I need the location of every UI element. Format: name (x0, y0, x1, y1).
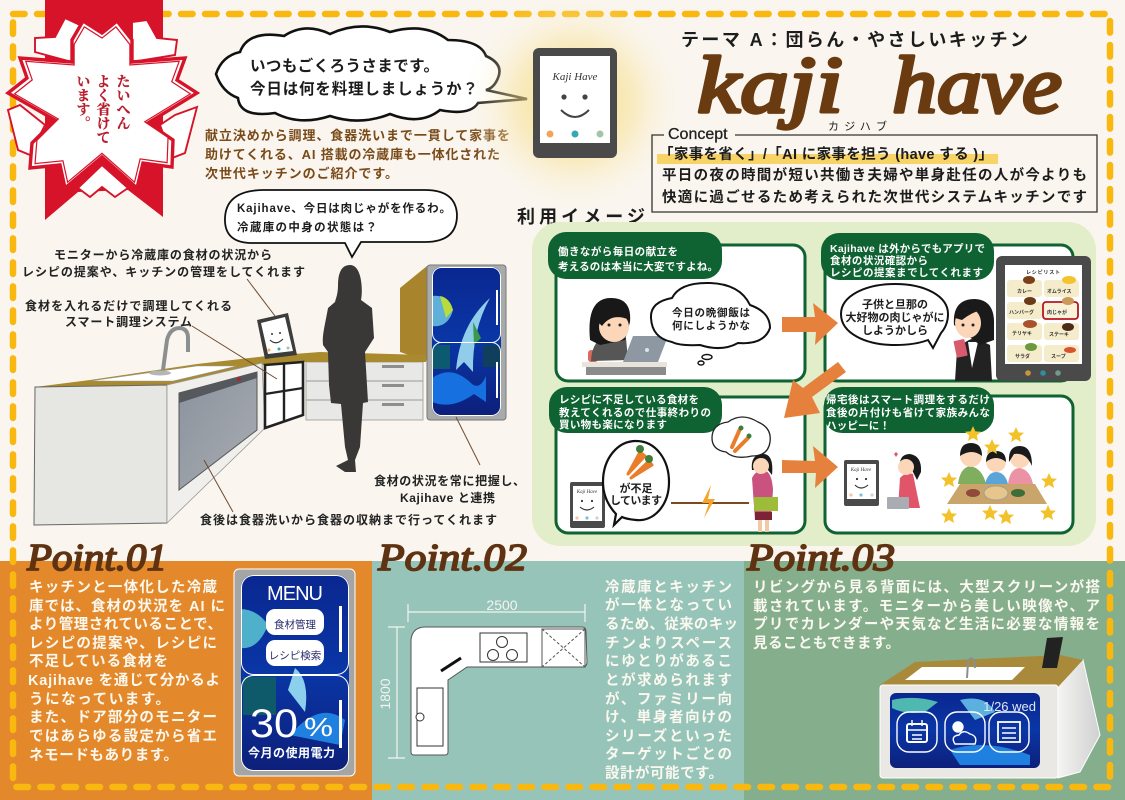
speech cloud: greeting: 今日は何を料理しましょうか？ (250, 79, 478, 98)
card 2: app (821, 233, 1091, 381)
island front (34, 385, 167, 525)
logo kaji have: have (892, 42, 1062, 130)
counter top (35, 352, 426, 387)
recipe tablet: 肉じゃが (1047, 309, 1067, 316)
card 1: thinking about menu: 働きながら毎日の献立を (558, 245, 678, 258)
speech oval: 子供と旦那の (862, 297, 928, 311)
annotations with leader lines: モニターから冷蔵庫の食材の状況から (54, 247, 272, 262)
woman silhouette (323, 265, 374, 472)
glowing tablet: Kaji Have (552, 71, 598, 83)
point 02 text: にゆとりがあるこ (605, 652, 732, 670)
badge text (74, 74, 130, 144)
fridge menu screen: 今月の使用電力 (248, 745, 335, 760)
point 01 text: キッチンと一体化した冷蔵 (29, 579, 218, 596)
fridge menu screen: 食材管理 (274, 618, 316, 631)
speech oval with carrots: が不足 (620, 481, 652, 495)
arrow: card 2 to card 3 (784, 362, 846, 418)
woman with phone (953, 299, 994, 381)
fridge menu screen: レシピ検索 (269, 649, 321, 662)
concept box: 快適に過ごせるため考えられた次世代システムキッチンです (662, 188, 1087, 206)
point 01 text: うになっています。 (29, 691, 170, 708)
badge text: たいへん (114, 74, 130, 130)
woman at laptop (582, 298, 668, 375)
intro text: 助けてくれる、AI 搭載の冷蔵庫も一体化された (205, 147, 500, 162)
concept box: 「家事を省く」/「AI に家事を担う (have する )」 (659, 145, 993, 163)
arrow: card 3 to card 4 (782, 446, 838, 488)
annotations with leader lines: 食材を入れるだけで調理してくれる (25, 298, 232, 313)
point 03 heading: Point.03 (746, 537, 895, 579)
annotations with leader lines: Kajihave と連携 (400, 490, 495, 505)
speech bubble: woman asks kajihave (225, 190, 457, 257)
point 01 heading: Point.01 (26, 537, 167, 579)
usage image heading: 利用イメージ (517, 207, 645, 227)
fridge menu screen: 30 (250, 702, 298, 746)
card 2: app: レシピの提案までしてくれます (830, 266, 983, 279)
red ribbon badge (8, 0, 197, 220)
card 3: shopping: 買い物も楽になります (559, 418, 667, 431)
speech cloud: greeting: いつもごくろうさまです。 (250, 56, 439, 75)
panel: point 03 (746, 537, 1100, 778)
recipe tablet: カレー (1017, 288, 1032, 295)
tablet: Kaji Have (850, 468, 872, 473)
point 02 text: が、ファミリー向 (605, 690, 732, 708)
thought cloud with carrots (712, 417, 770, 457)
annotations with leader lines: 食後は食器洗いから食器の収納まで行ってくれます (200, 512, 497, 527)
point 02 text: るため、従来のキッ (605, 616, 738, 633)
recipe tablet: スープ (1051, 353, 1066, 360)
point 02 text: 設計が可能です。 (605, 764, 723, 782)
intro text: 献立決めから調理、食器洗いまで一貫して家事を (205, 128, 510, 143)
point 03 text (753, 578, 1100, 652)
card 3: shopping: レシピに不足している食材を (559, 393, 699, 406)
card 4: happy family: ハッピーに！ (826, 420, 890, 432)
badge text: います。 (74, 74, 90, 130)
recipe tablet: ハンバーグ (1009, 309, 1034, 316)
speech oval with carrots (603, 441, 669, 525)
concept box: 平日の夜の時間が短い共働き夫婦や単身赴任の人が今よりも (662, 166, 1087, 184)
thought bubble: 何にしようかな (672, 319, 750, 332)
connection line with lightning (671, 485, 749, 518)
stars (941, 426, 1057, 524)
point 01 text: ではあらゆる設定から省エ (29, 727, 217, 745)
fridge menu screen (234, 569, 355, 776)
point 03 text: リビングから見る背面には、大型スクリーンが搭 (753, 578, 1100, 596)
glowing tablet (463, 0, 687, 214)
recipe tablet: サラダ (1015, 353, 1030, 360)
point 02 text: チンよりスペース (605, 635, 732, 652)
woman cooking (887, 452, 921, 509)
point 03 text: 見ることもできます。 (753, 635, 900, 652)
floor plan: 1800 (377, 678, 393, 710)
card 4: happy family (824, 387, 1073, 533)
counter tablet (257, 313, 297, 359)
fridge menu screen: MENU (267, 583, 323, 605)
card 4: happy family: 帰宅後はスマート調理をするだけ (826, 393, 990, 406)
island with back screen (880, 637, 1100, 778)
panel: point 02 (377, 537, 738, 782)
card 2: app: 食材の状況確認から (830, 254, 928, 267)
small tablet: Kaji Have (576, 490, 598, 495)
logo kaji have (697, 42, 1062, 133)
panel: point 01 (26, 537, 355, 776)
speech bubble: woman asks kajihave: Kajihave、今日は肉じゃがを作るわ。 (237, 201, 451, 215)
tablet (844, 460, 879, 506)
speech oval with carrots: しています (610, 494, 662, 507)
annotations with leader lines: スマート調理システム (65, 315, 192, 329)
thought bubble (651, 283, 770, 365)
point 02 text (605, 579, 738, 782)
arrow: card 1 to card 2 (782, 303, 838, 345)
family eating (947, 443, 1047, 504)
bottom colour bands (0, 561, 1125, 800)
speech oval: しようかしら (862, 324, 928, 337)
point 02 text: け、単身者向けの (605, 708, 732, 726)
point 02 text: 冷蔵庫とキッチン (605, 579, 732, 596)
point 01 text (28, 579, 225, 764)
sink (90, 366, 237, 381)
thought bubble: 今日の晩御飯は (672, 306, 750, 319)
annotations with leader lines (22, 247, 525, 527)
logo kaji have: kaji (697, 42, 843, 130)
floor plan (377, 597, 587, 758)
point 02 text: シリーズといった (605, 727, 732, 745)
recipe tablet: ステーキ (1049, 332, 1069, 338)
dishwasher door (179, 372, 257, 490)
intro text: 次世代キッチンのご紹介です。 (205, 166, 398, 181)
speech cloud: greeting (216, 26, 527, 121)
speech oval (841, 284, 948, 348)
smart cooker window (265, 362, 303, 428)
card 1: thinking about menu: 考えるのは本当に大変ですよね。 (558, 260, 718, 273)
fridge menu screen: % (304, 712, 333, 742)
point 02 text: とが求められます (605, 671, 732, 689)
speech bubble: woman asks kajihave: 冷蔵庫の中身の状態は？ (237, 220, 377, 234)
point 01 text: より管理されていることで、 (29, 615, 222, 633)
point 01 text: レシピの提案や、レシピに (29, 634, 217, 652)
recipe tablet: レシピリスト (1026, 270, 1060, 276)
kitchen illustration (34, 265, 506, 525)
woman with basket (752, 454, 778, 532)
recipe tablet: テリヤキ (1012, 331, 1032, 337)
point 01 text: また、ドア部分のモニター (29, 709, 217, 726)
annotations with leader lines: レシピの提案や、キッチンの管理をしてくれます (22, 264, 305, 279)
card 3: shopping: 教えてくれるので仕事終わりの (559, 406, 711, 419)
panel: usage image (532, 222, 1096, 546)
intro text (205, 128, 510, 181)
island side (167, 363, 265, 523)
point 02 heading: Point.02 (377, 537, 527, 579)
island with back screen: 1/26 wed (983, 699, 1036, 714)
card 1: thinking about menu (548, 232, 805, 381)
card 2: app: Kajihave は外からでもアプリで (830, 242, 985, 255)
recipe tablet: オムライス (1047, 288, 1071, 295)
screen icons (897, 712, 1029, 752)
point 01 text: ネモードもあります。 (29, 747, 178, 764)
back counter cabinets (306, 362, 423, 420)
point 03 text: 載されています。モニターから美しい映像や、ア (753, 597, 1100, 615)
card 3: shopping (549, 387, 805, 533)
fridge with aquarium screen (427, 265, 506, 420)
recipe tablet (996, 256, 1091, 381)
floor plan: 2500 (486, 597, 518, 613)
small tablet (570, 482, 605, 528)
speech oval: 大好物の肉じゃがに (846, 310, 944, 324)
logo kaji have: カジハブ (828, 119, 887, 133)
point 02 text: が一体となってい (605, 596, 732, 614)
gold side wall (400, 266, 427, 361)
point 02 text: ターゲットごとの (605, 745, 732, 763)
point 03 text: プリでカレンダーや天気など生活に必要な情報を (753, 615, 1100, 633)
card 4: happy family: 食後の片付けも省けて家族みんな (826, 406, 990, 419)
badge text: よく省けて (94, 74, 110, 144)
point 01 text: 不足している食材を (29, 652, 168, 670)
theme heading: テーマ A：団らん・やさしいキッチン (681, 30, 1028, 50)
point 01 text: 庫では、食材の状況を AI に (29, 597, 225, 615)
annotations with leader lines: 食材の状況を常に把握し、 (374, 473, 525, 488)
concept box: Concept (668, 126, 728, 143)
point 01 text: Kajihave を通じて分かるよ (28, 672, 220, 689)
faucet (149, 328, 188, 376)
concept box (652, 126, 1097, 212)
